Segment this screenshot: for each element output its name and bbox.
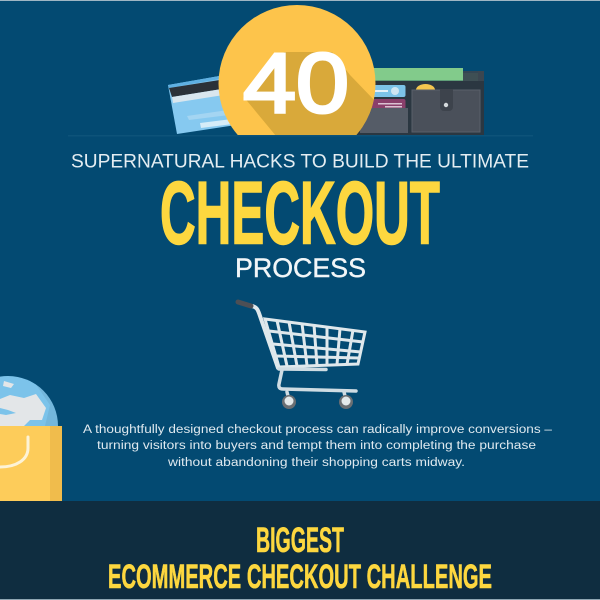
cards in wallet [370,85,406,111]
bag handle [0,437,28,467]
coin [416,84,435,90]
icon: shopping bag [0,426,62,501]
title: process: PROCESS [235,253,366,283]
intro paragraph: turning visitors into buyers and tempt them into completing the purchase [97,440,536,452]
handle [238,302,278,368]
number 40: 40 [243,36,349,130]
wheels [282,395,353,409]
shelf line [68,135,533,136]
icon: credit card [168,75,236,134]
banknotes [370,68,478,83]
icon: wallet [357,68,484,135]
intro paragraph: without abandoning their shopping carts midway. [167,457,465,469]
basket grid [265,319,365,367]
subtitle: SUPERNATURAL HACKS TO BUILD THE ULTIMATE [71,152,529,172]
intro paragraph: A thoughtfully designed checkout process can radically improve conversions – [83,424,553,436]
icon: globe [0,376,58,426]
chassis [279,369,356,400]
badge: 40 coin [218,5,376,135]
section heading [108,521,492,596]
section band: biggest challenge [0,501,600,600]
intro paragraph [83,424,553,469]
clasp [440,89,453,111]
icon: shopping cart [238,302,365,409]
section heading: BIGGEST [256,521,344,560]
